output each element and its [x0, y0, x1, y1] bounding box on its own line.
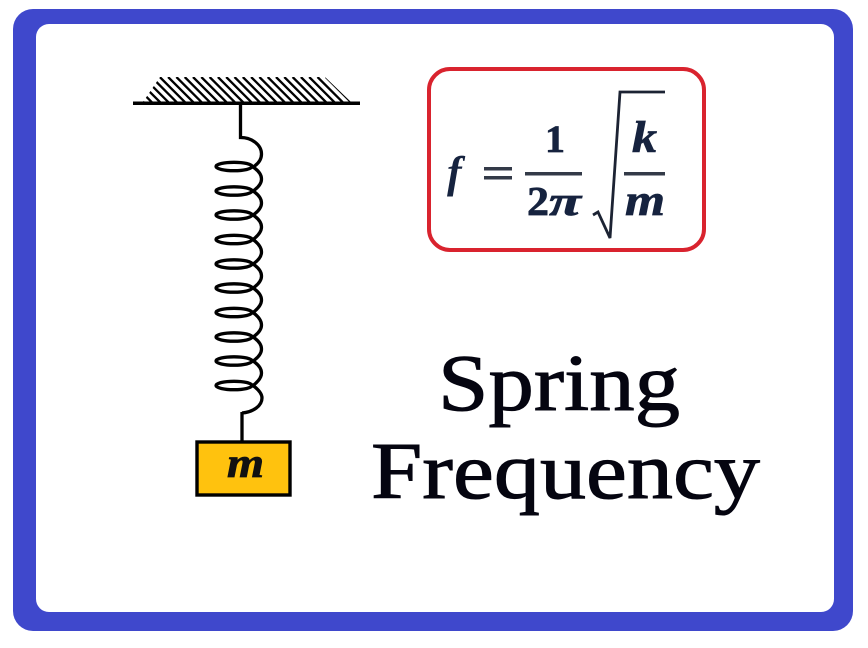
title: Frequency [371, 428, 760, 516]
icon: hatched ceiling support [110, 77, 360, 105]
formula: frequency equation [447, 92, 665, 238]
mass label: m [227, 441, 264, 487]
formula: frequency equation: π [549, 178, 583, 224]
title [371, 340, 760, 516]
icon: mass block [197, 441, 290, 495]
icon: coil spring [216, 104, 262, 441]
formula: frequency equation: m [625, 176, 665, 225]
formula: frequency equation: 1 [545, 118, 565, 161]
formula: frequency equation: 2 [527, 178, 549, 224]
panel: formula box [429, 69, 704, 250]
formula: frequency equation: f [447, 148, 466, 197]
formula: frequency equation: k [632, 113, 657, 162]
title: Spring [438, 340, 680, 428]
